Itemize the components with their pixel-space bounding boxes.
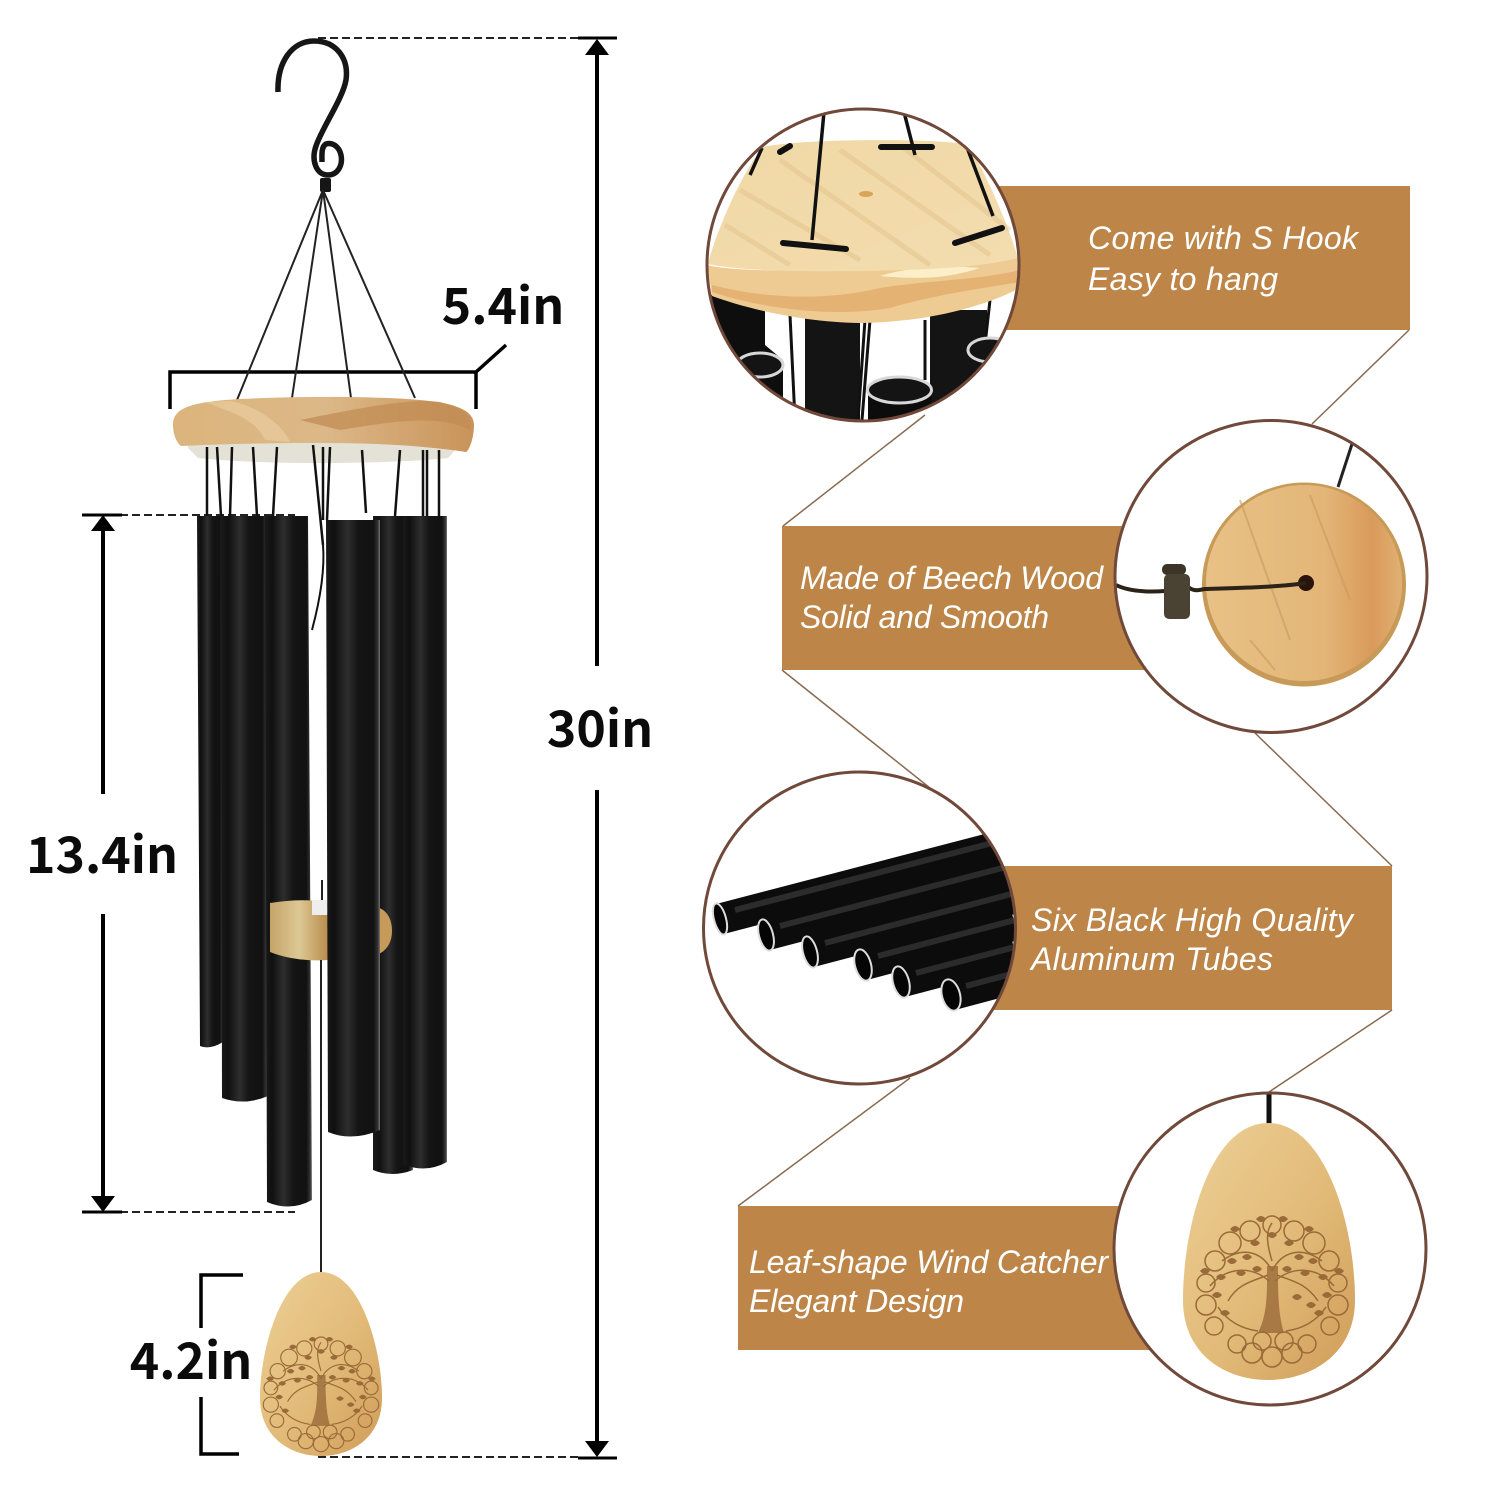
middle striker	[376, 907, 392, 955]
dimension: wood width 5.4in: 5.4in	[442, 267, 564, 339]
caption band 3: Six Black High Quality	[1031, 902, 1355, 938]
tubes below disk	[710, 295, 1012, 425]
caption band 2: Made of Beech Wood	[800, 560, 1104, 596]
caption band 4: Elegant Design	[749, 1283, 964, 1319]
dimension: wind catcher 4.2in	[130, 1275, 252, 1454]
caption text: Come with S Hook	[1088, 220, 1360, 256]
connector lines	[738, 330, 1409, 1206]
caption text: Easy to hang	[1088, 261, 1278, 297]
dimension: wood width 5.4in	[170, 267, 564, 409]
wooden disk	[173, 397, 474, 463]
cords	[750, 112, 1002, 249]
center tube	[326, 520, 380, 1137]
tubes	[221, 516, 268, 1102]
icon: S hook	[278, 41, 346, 192]
dimension: overall height 30in: 30in	[547, 690, 653, 762]
wind catcher with tree	[260, 1272, 382, 1456]
caption band 3	[960, 866, 1392, 1010]
wind chime product	[173, 41, 474, 1456]
detail circle: top of wooden disk	[707, 109, 1020, 425]
caption text	[1088, 220, 1360, 297]
detail circle: wood bead and cord	[1115, 420, 1427, 732]
caption band 4	[738, 1206, 1158, 1350]
caption band 2	[782, 526, 1162, 670]
detail circle: wind catcher	[1114, 1093, 1426, 1405]
caption band 2: Solid and Smooth	[800, 599, 1049, 635]
hanging strings	[237, 190, 415, 400]
caption band 3: Aluminum Tubes	[1029, 941, 1273, 977]
back tubes	[197, 516, 223, 1047]
dimension: overall height 30in	[318, 38, 653, 1458]
dimension: tube length 13.4in	[26, 515, 295, 1212]
caption band 1	[960, 186, 1410, 330]
pendant cord	[321, 880, 322, 1275]
caption band 4: Leaf-shape Wind Catcher	[749, 1244, 1109, 1280]
detail circle: black tubes	[704, 772, 1016, 1084]
disk rim	[707, 255, 1020, 323]
disk top	[708, 140, 1018, 271]
dimension: wind catcher 4.2in: 4.2in	[130, 1322, 252, 1394]
dimension: tube length 13.4in: 13.4in	[26, 816, 178, 888]
wires under disk	[207, 445, 439, 545]
